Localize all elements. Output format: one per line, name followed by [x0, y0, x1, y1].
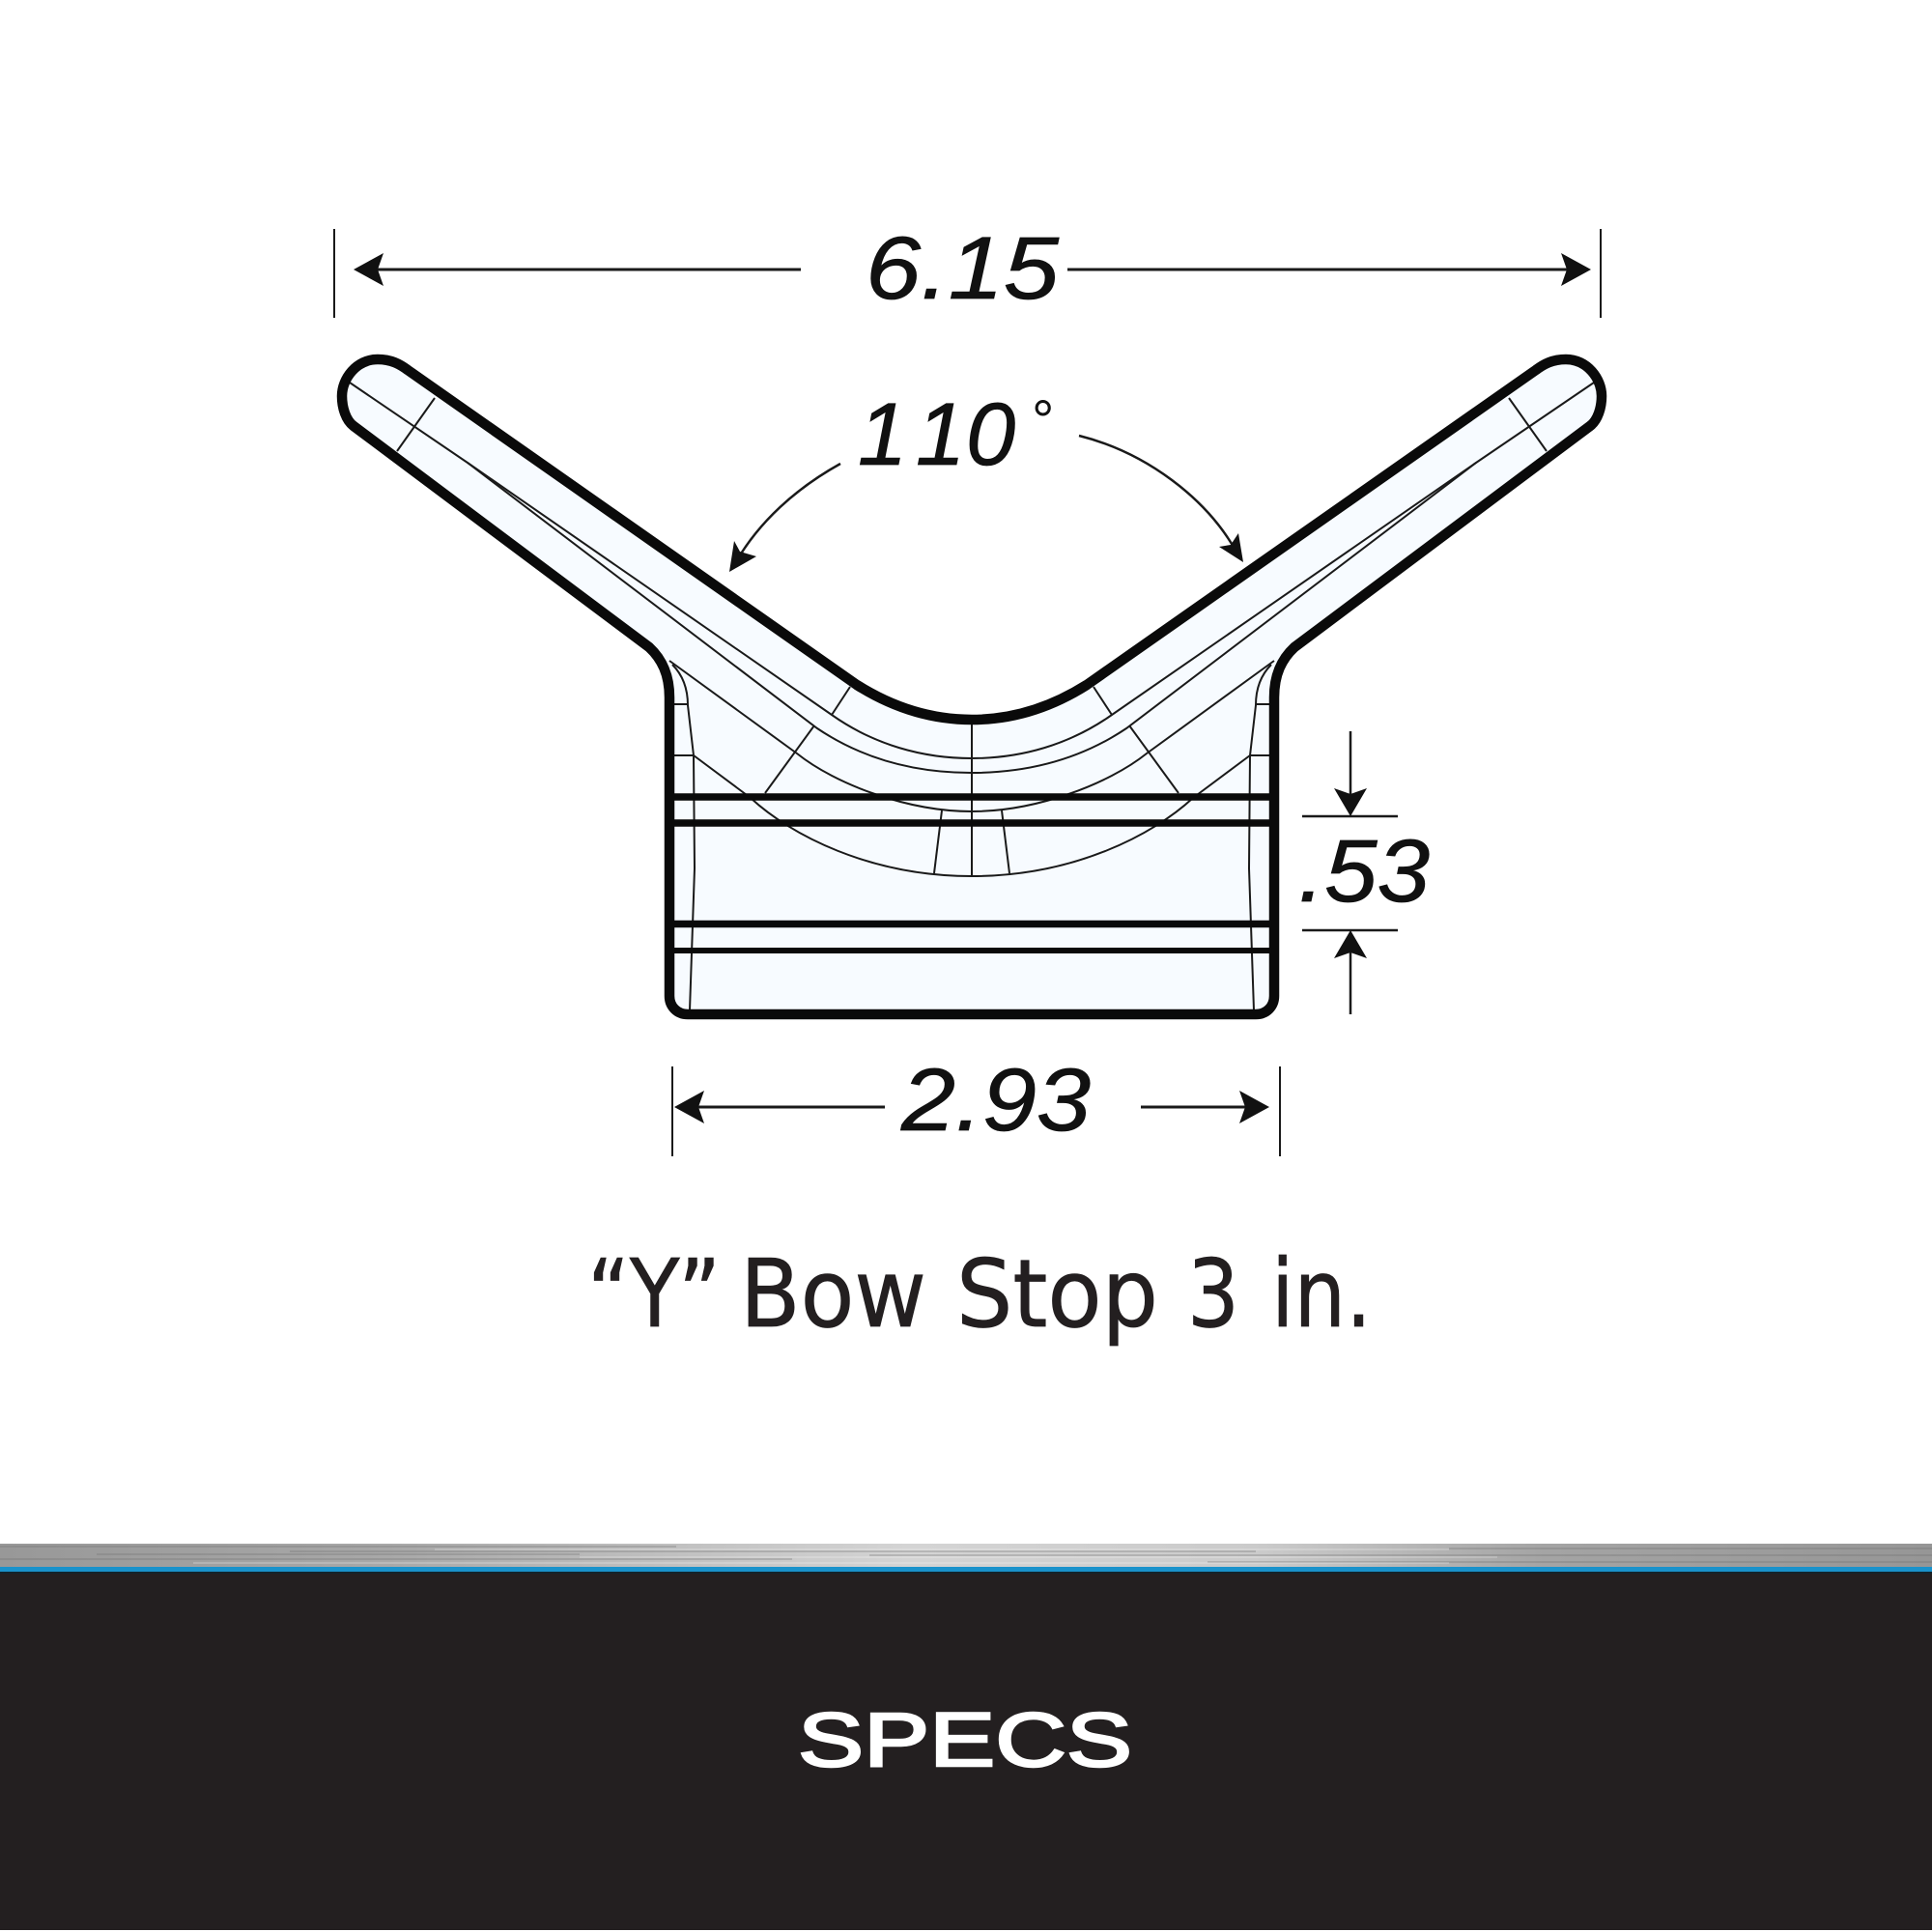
dimension: height .53 — [1298, 731, 1430, 1014]
dimension: angle 110 degrees — [729, 385, 1243, 572]
bow stop drawing — [342, 359, 1602, 1014]
dimension: angle 110 degrees: 1 — [916, 385, 965, 484]
brushed steel band — [0, 1544, 1932, 1567]
dimension: base width 2.93 — [672, 1051, 1280, 1156]
product caption: Bow — [740, 1239, 926, 1349]
product caption: Stop — [956, 1239, 1158, 1349]
dimension: angle 110 degrees: ° — [1030, 389, 1052, 452]
product caption: in. — [1271, 1239, 1372, 1349]
product caption — [587, 1239, 1372, 1349]
dimension: angle 110 degrees: 0 — [966, 385, 1015, 484]
product caption: 3 — [1187, 1239, 1239, 1349]
dimension: overall width 6.15 — [334, 219, 1601, 318]
dimension: height .53: .53 — [1298, 822, 1430, 921]
footer heading: SPECS — [798, 1696, 1132, 1782]
footer panel — [0, 1572, 1932, 1930]
dimension: angle 110 degrees: 1 — [858, 385, 907, 484]
blue accent line — [0, 1567, 1932, 1572]
dimension: base width 2.93: 2.93 — [900, 1051, 1091, 1150]
product caption: “Y” — [587, 1239, 721, 1349]
dimension: overall width 6.15: 6.15 — [866, 219, 1060, 318]
